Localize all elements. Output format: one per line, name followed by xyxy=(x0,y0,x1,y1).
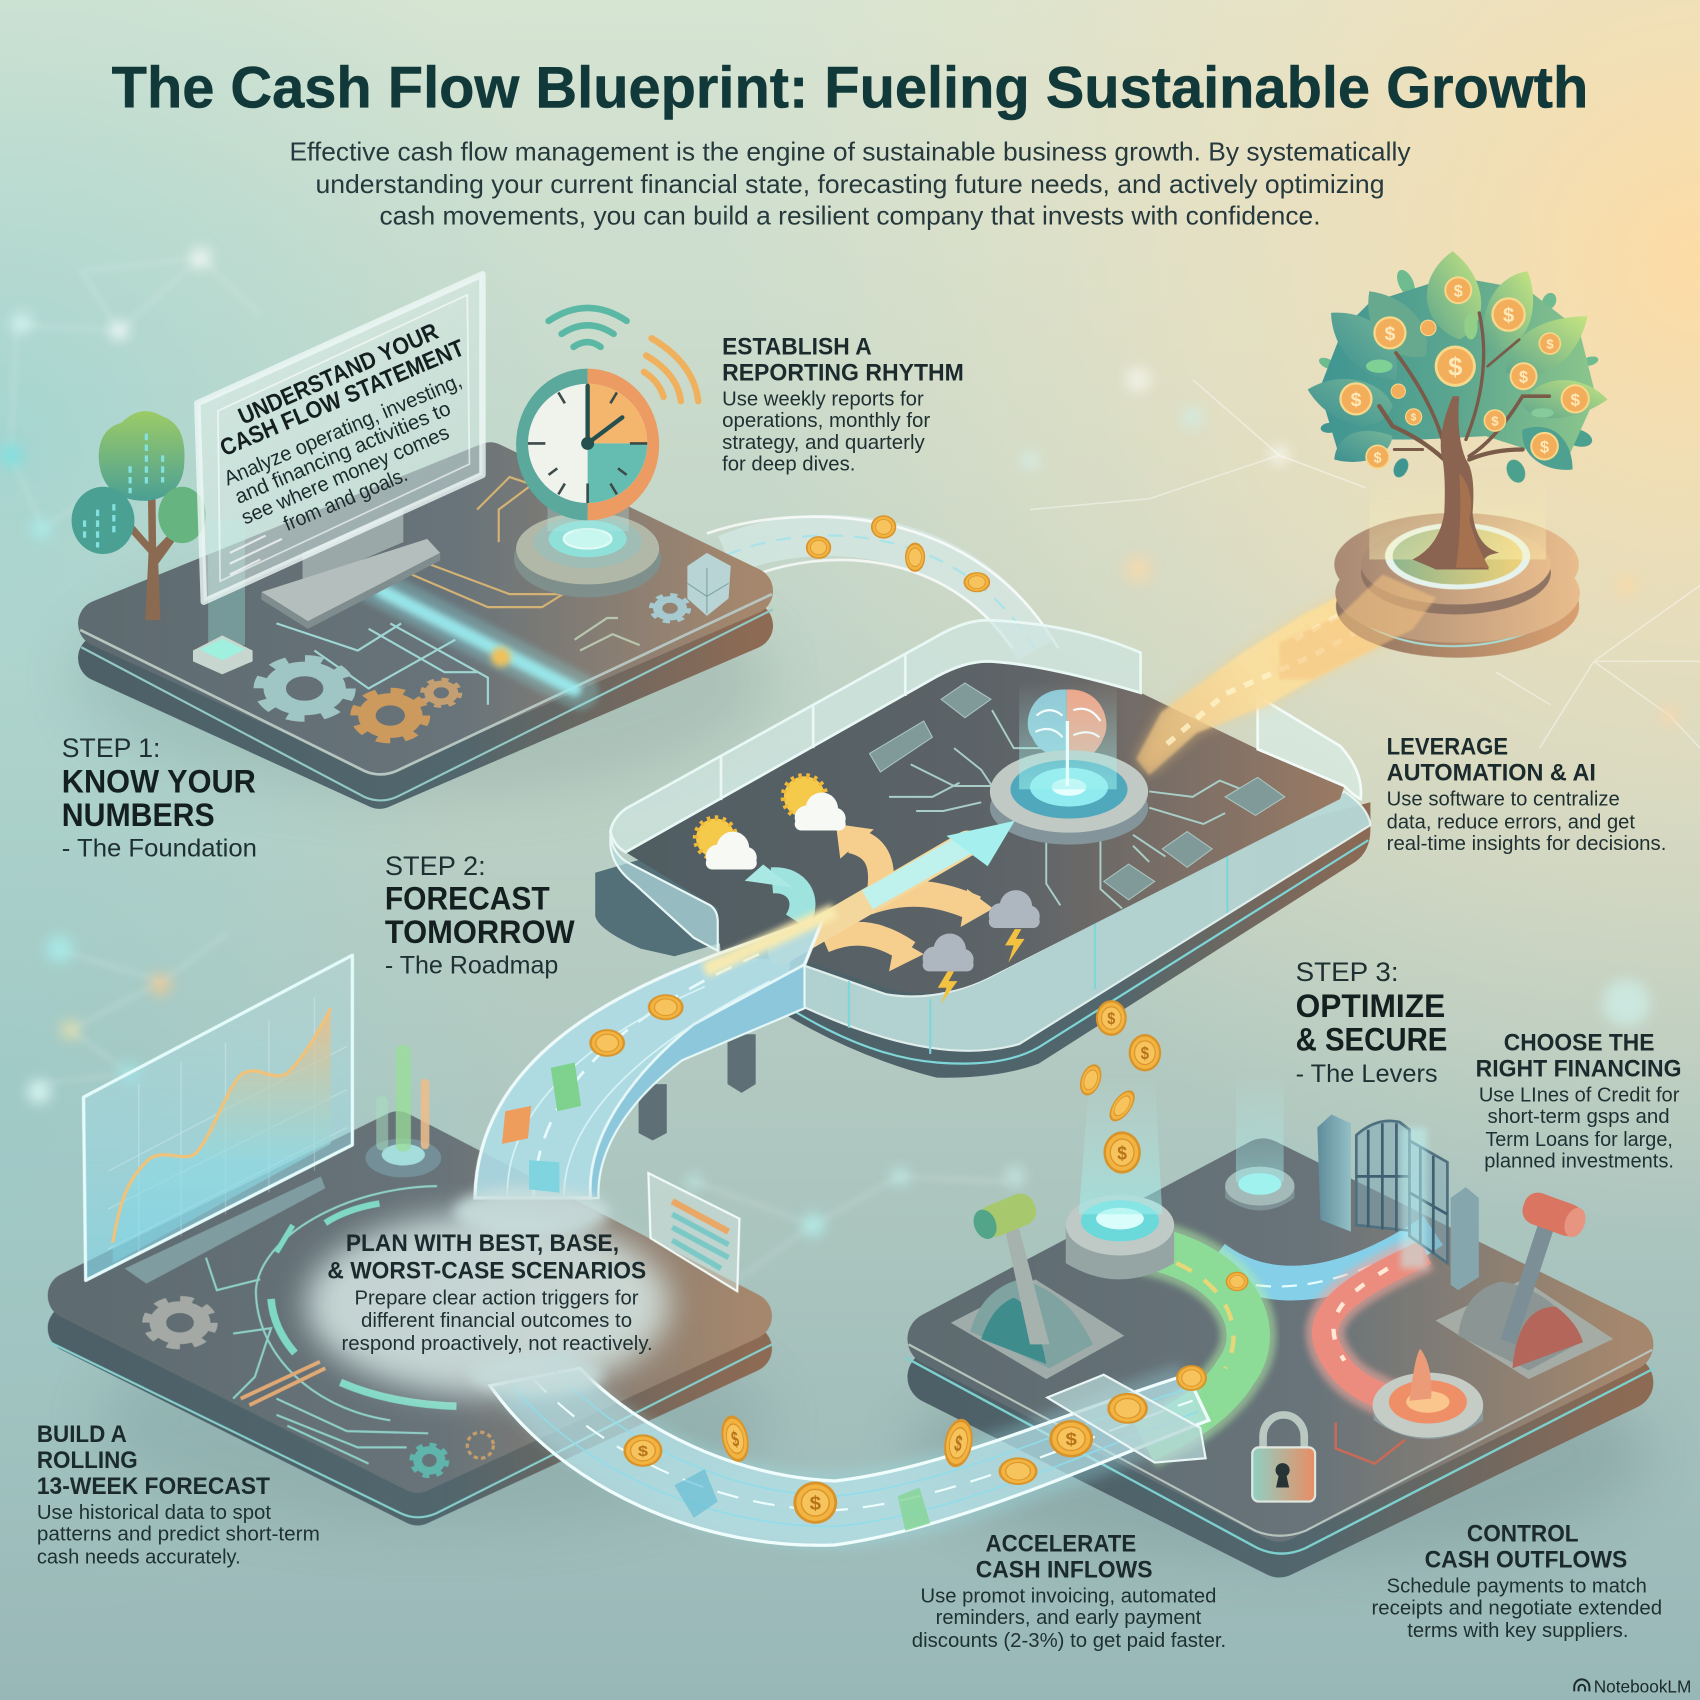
text: rolling forecast: ROLLING xyxy=(37,1447,138,1474)
text: leverage automation and AI: LEVERAGE xyxy=(1387,734,1508,761)
text: leverage automation and AI: real-time insights for decisions. xyxy=(1387,832,1666,855)
text: establish a reporting rhythm: REPORTING RHYTHM xyxy=(722,360,964,387)
glass screen xyxy=(197,274,482,602)
callout glow: scenarios xyxy=(306,1186,670,1395)
coins on bottom road: $ xyxy=(1065,1430,1077,1450)
road fade into fog xyxy=(469,1355,604,1394)
text: establish a reporting rhythm: strategy, and quarterly xyxy=(722,431,926,454)
gear blue xyxy=(653,596,688,621)
small gear ring xyxy=(467,1432,493,1458)
coins on upper road xyxy=(804,515,990,592)
text: control cash outflows: CASH OUTFLOWS xyxy=(1425,1547,1627,1574)
coins on tree: $ xyxy=(1351,390,1362,411)
intro paragraph: understanding your current financial state, forecasting future needs, and actively optimizing xyxy=(315,169,1385,199)
intro paragraph: cash movements, you can build a resilient company that invests with confidence. xyxy=(379,200,1321,230)
icon: money tree xyxy=(1279,251,1608,679)
circuit traces xyxy=(276,477,640,705)
icon: sun and cloud 2 xyxy=(784,776,846,830)
big leaves xyxy=(1308,251,1608,470)
coins on tree: $ xyxy=(1448,353,1462,381)
text: choose the right financing: short-term gsps and xyxy=(1488,1105,1670,1128)
road side wall xyxy=(591,965,804,1198)
circuit traces xyxy=(889,710,1247,909)
text: step 2 label: TOMORROW xyxy=(385,914,575,950)
monitor body text: and financing activities to xyxy=(231,397,454,509)
left glass wall xyxy=(610,832,718,951)
coins on bottom road: $ xyxy=(729,1426,741,1452)
coins on tree: $ xyxy=(1374,450,1382,466)
coins on tree: $ xyxy=(1491,413,1499,428)
coins on tree: $ xyxy=(1519,368,1528,386)
text: choose the right financing: Term Loans for large, xyxy=(1485,1128,1673,1151)
green road xyxy=(1144,1247,1248,1442)
text: step 3 label: OPTIMIZE xyxy=(1296,988,1445,1024)
text: establish a reporting rhythm: Use weekly reports for xyxy=(722,387,924,410)
text: control cash outflows xyxy=(1371,1521,1662,1642)
text: step 2 label: STEP 2: xyxy=(385,850,486,881)
icon: storm cloud 2 xyxy=(923,933,974,1004)
text: step 2 label: FORECAST xyxy=(385,881,550,917)
monitor heading: CASH FLOW STATEMENT xyxy=(216,334,469,462)
text: establish a reporting rhythm xyxy=(722,334,964,476)
text: rolling forecast: Use historical data to spot xyxy=(37,1501,271,1524)
coins on tree: $ xyxy=(1411,413,1417,424)
gear small xyxy=(424,680,459,705)
text: scenario planning xyxy=(327,1230,653,1355)
text: control cash outflows: Schedule payments to match xyxy=(1387,1575,1647,1598)
text: accelerate cash inflows: ACCELERATE xyxy=(986,1530,1136,1557)
text: control cash outflows: CONTROL xyxy=(1467,1521,1579,1548)
text: step 3 label xyxy=(1296,956,1447,1088)
foliage mass xyxy=(1319,276,1596,463)
golden road over base xyxy=(1279,574,1436,679)
coins on tree xyxy=(1339,276,1590,469)
coin dot xyxy=(491,647,511,667)
text: rolling forecast: 13-WEEK FORECAST xyxy=(37,1473,270,1500)
monitor body text: from and goals. xyxy=(280,463,411,536)
text: scenario planning: PLAN WITH BEST, BASE, xyxy=(346,1230,619,1257)
glass ramp xyxy=(1047,1375,1206,1463)
side glass wall xyxy=(1258,696,1361,799)
panel: step 3 platform xyxy=(905,1068,1654,1561)
icon: button xyxy=(1373,1349,1483,1439)
gear grey xyxy=(149,1301,211,1345)
glass dome xyxy=(1369,469,1546,559)
brain AI xyxy=(1028,689,1107,768)
road deck xyxy=(475,916,824,1198)
gear large xyxy=(262,661,347,716)
tree base xyxy=(1334,513,1580,658)
monitor heading: UNDERSTAND YOUR xyxy=(234,318,442,430)
road deck xyxy=(490,1368,1209,1545)
panel: step 1 platform xyxy=(76,466,773,800)
text: scenario planning: & WORST-CASE SCENARIOS xyxy=(327,1257,646,1284)
coins on bottom road: $ xyxy=(953,1430,965,1457)
icon: sun and cloud xyxy=(696,819,757,870)
small pedestal xyxy=(1225,1068,1295,1210)
green lever xyxy=(951,1189,1124,1379)
scenario arrow teal xyxy=(746,865,802,922)
gate xyxy=(1317,1115,1479,1290)
clock face xyxy=(516,369,659,520)
text: scenario planning: Prepare clear action triggers for xyxy=(355,1286,639,1309)
text: control cash outflows: receipts and negotiate extended xyxy=(1371,1596,1662,1619)
main arrow to AI xyxy=(781,821,1015,952)
text: step 3 label: - The Levers xyxy=(1296,1060,1438,1088)
text: choose the right financing: CHOOSE THE xyxy=(1504,1030,1654,1057)
text: leverage automation and AI: Use software to centralize xyxy=(1387,788,1620,811)
text: step 1 label: KNOW YOUR xyxy=(62,764,256,800)
falling coins: $ xyxy=(1107,1010,1116,1028)
text: establish a reporting rhythm: for deep dives. xyxy=(722,453,855,476)
road connecting step 1 and step 2 xyxy=(707,517,1058,651)
small leaves xyxy=(1317,267,1599,486)
text: control cash outflows: terms with key suppliers. xyxy=(1407,1619,1628,1642)
text: choose the right financing: Use LInes of Credit for xyxy=(1479,1084,1680,1107)
back glass wall xyxy=(610,620,1141,852)
glowing data stream xyxy=(374,585,580,692)
text: accelerate cash inflows: discounts (2-3%) to get paid faster. xyxy=(912,1629,1226,1652)
left lobe base xyxy=(595,857,759,956)
circuit traces xyxy=(206,1186,437,1464)
coins on bottom road: $ xyxy=(810,1493,821,1515)
text: scenario planning: different financial outcomes to xyxy=(361,1309,632,1332)
text: scenario planning: respond proactively, not reactively. xyxy=(342,1332,653,1355)
front glass wall xyxy=(802,791,1370,1051)
coins on tree: $ xyxy=(1540,437,1549,456)
icon: clock on pedestal xyxy=(514,308,698,597)
falling coins: $ xyxy=(1117,1142,1128,1164)
red lever xyxy=(1435,1189,1613,1379)
text: rolling forecast: BUILD A xyxy=(37,1421,127,1448)
text: rolling forecast: patterns and predict short-term xyxy=(37,1523,320,1546)
coins on tree: $ xyxy=(1503,305,1514,327)
text: step 3 label: & SECURE xyxy=(1296,1022,1447,1058)
gear orange xyxy=(357,693,423,739)
data blocks xyxy=(687,553,731,616)
icon: padlock xyxy=(1252,1415,1315,1502)
scenario arrow yellow low xyxy=(824,934,924,971)
road: step 2 to step 3 upper xyxy=(475,911,835,1198)
monitor stand xyxy=(261,510,440,629)
trunk and branches xyxy=(1379,313,1549,569)
text: choose the right financing xyxy=(1476,1030,1682,1173)
text: accelerate cash inflows: Use promot invoicing, automated xyxy=(920,1584,1216,1607)
panel: monitor with statement text xyxy=(197,274,482,629)
text: choose the right financing: planned investments. xyxy=(1484,1150,1674,1173)
chips xyxy=(870,683,1285,900)
blue road xyxy=(1214,1231,1433,1287)
chart monitor xyxy=(83,955,352,1284)
text: rolling forecast: cash needs accurately. xyxy=(37,1545,241,1568)
coins on tree: $ xyxy=(1385,324,1396,345)
support pillars xyxy=(639,1034,756,1141)
panel: step 2 platform xyxy=(595,575,1435,1141)
icon: storm cloud xyxy=(989,890,1040,963)
bills on roads xyxy=(502,1062,930,1531)
coin dispenser pedestal xyxy=(1066,1073,1174,1279)
title: The Cash Flow Blueprint: Fueling Sustainable Growth xyxy=(112,55,1588,120)
monitor body text: see where money comes xyxy=(238,421,453,529)
text: establish a reporting rhythm: ESTABLISH A xyxy=(722,334,872,361)
base side xyxy=(784,802,1370,1078)
floating report panel xyxy=(648,1173,739,1291)
pedestal xyxy=(514,477,661,597)
intro paragraph: Effective cash flow management is the engine of sustainable business growth. By systematically xyxy=(289,136,1411,166)
text: step 1 label: STEP 1: xyxy=(62,732,160,763)
text: step 1 label: - The Foundation xyxy=(62,835,257,863)
gear teal xyxy=(413,1446,446,1475)
text: step 3 label: STEP 3: xyxy=(1296,956,1399,987)
icon: tree xyxy=(72,411,206,620)
bars xyxy=(365,1045,441,1177)
coins on tree: $ xyxy=(1454,282,1463,300)
text: choose the right financing: RIGHT FINANCING xyxy=(1476,1056,1682,1083)
red road xyxy=(1325,1252,1426,1404)
scenario arrow yellow up xyxy=(836,824,881,889)
text: step 1 label xyxy=(62,732,257,863)
text: step 2 label: - The Roadmap xyxy=(385,952,558,980)
hologram projector xyxy=(193,520,253,674)
orange strokes xyxy=(241,1362,325,1405)
intro paragraph xyxy=(289,136,1411,230)
text: accelerate cash inflows: CASH INFLOWS xyxy=(976,1556,1152,1583)
wifi arcs orange xyxy=(644,338,698,401)
coins on tree: $ xyxy=(1570,390,1580,409)
road: bottom coin road xyxy=(469,1355,1209,1545)
panel: step 2 lower-left platform xyxy=(50,955,772,1529)
text: establish a reporting rhythm: operations, monthly for xyxy=(722,409,930,432)
coins on bottom road: $ xyxy=(638,1442,649,1460)
golden road to tree xyxy=(1136,575,1435,775)
scenario arrow yellow right xyxy=(867,889,993,927)
watermark: NotebookLM: NotebookLM xyxy=(1594,1676,1691,1696)
teal arcs xyxy=(271,1203,456,1406)
AI pedestal xyxy=(990,681,1148,845)
monitor body text: Analyze operating, investing, xyxy=(221,369,465,490)
falling coins: $ xyxy=(1141,1044,1149,1063)
text: accelerate cash inflows: reminders, and early payment xyxy=(936,1606,1202,1629)
floor xyxy=(626,661,1344,993)
text: step 1 label: NUMBERS xyxy=(62,797,215,833)
wifi arcs teal xyxy=(549,308,627,347)
text: accelerate cash inflows xyxy=(912,1530,1226,1652)
road glow xyxy=(531,1377,1193,1510)
coins on bottom road xyxy=(589,994,1248,1524)
falling coins xyxy=(1076,1000,1161,1174)
text: leverage automation and AI: data, reduce errors, and get xyxy=(1387,810,1635,833)
text: rolling forecast xyxy=(37,1421,320,1568)
coins on tree: $ xyxy=(1546,337,1554,352)
text: leverage automation and AI: AUTOMATION & AI xyxy=(1387,760,1596,787)
text: step 2 label xyxy=(385,850,575,980)
text: leverage automation and AI xyxy=(1387,734,1666,855)
